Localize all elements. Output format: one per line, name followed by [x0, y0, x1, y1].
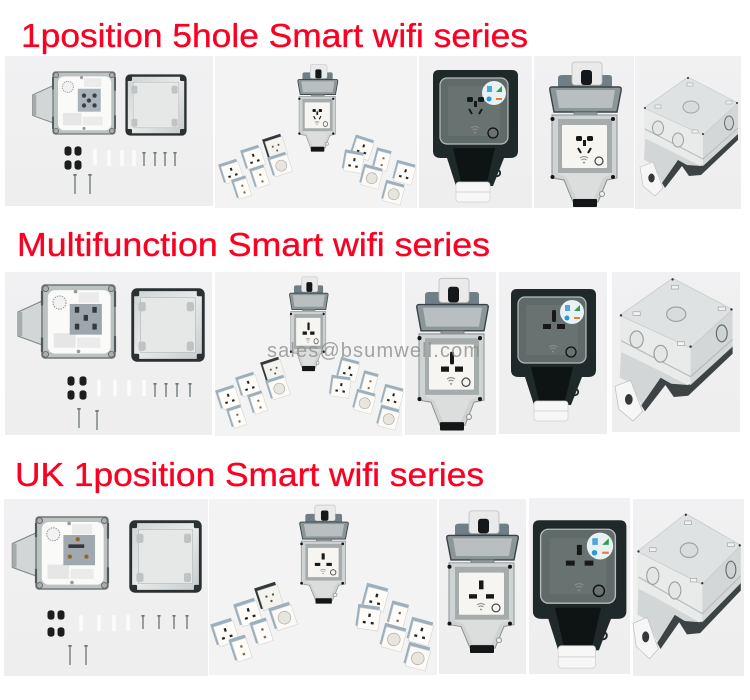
panel: row 3 socket modules: [209, 499, 437, 675]
icon: long screws: [68, 645, 88, 665]
panel: row 1 kit parts: [5, 56, 213, 206]
icon: rubber plugs: [64, 146, 82, 170]
icon: open socket unit: [298, 65, 338, 152]
icon: lid: [131, 522, 200, 591]
icon: junction box: [633, 514, 741, 659]
icon: closed socket cover: [433, 70, 518, 202]
panel: row 3 kit parts: [4, 499, 208, 676]
panel: row 1 closed unit: [419, 56, 532, 208]
icon: rubber plugs: [68, 376, 86, 400]
panel: row 2 socket modules: [215, 272, 405, 436]
icon: wall anchors: [93, 149, 136, 166]
icon: open socket unit: [300, 505, 348, 604]
panel: row 1 open unit: [534, 56, 634, 208]
icon: right module group: [341, 134, 417, 205]
icon: open socket unit: [290, 277, 328, 371]
icon: right module group: [329, 357, 405, 430]
panel: row 3 junction box: [633, 499, 744, 676]
icon: long screws: [77, 408, 99, 430]
icon: open base box: [12, 517, 108, 589]
icon: short screws: [142, 152, 177, 166]
title: Multifunction Smart wifi series: Multifunction Smart wifi series: [17, 226, 490, 263]
icon: open socket unit: [550, 62, 621, 207]
icon: short screws: [141, 615, 189, 629]
panel: row 2 junction box: [612, 272, 740, 432]
panel: row 2 open unit: [405, 272, 496, 435]
title: UK 1position Smart wifi series: UK 1position Smart wifi series: [15, 456, 484, 493]
icon: right module group: [355, 583, 434, 671]
panel: row 2 kit parts: [5, 272, 212, 435]
icon: junction box: [615, 278, 733, 421]
title: 1position 5hole Smart wifi series: 1position 5hole Smart wifi series: [21, 17, 528, 54]
panel: row 2 closed unit: [499, 272, 607, 434]
watermark: sales@bsumwell.com: [267, 340, 480, 362]
icon: junction box: [640, 77, 738, 196]
icon: left module group: [215, 356, 291, 429]
icon: rubber plugs: [48, 610, 64, 637]
panel: row 1 junction box: [635, 56, 741, 209]
icon: open base box: [18, 285, 115, 358]
panel: row 3 closed unit: [529, 498, 630, 674]
panel: row 1 socket modules: [215, 56, 417, 208]
icon: lid: [133, 290, 203, 360]
icon: left module group: [218, 133, 293, 200]
icon: open socket unit: [447, 511, 518, 653]
icon: closed socket cover: [511, 289, 596, 421]
icon: short screws: [153, 383, 192, 397]
panel: row 3 open unit: [439, 499, 526, 674]
icon: lid: [127, 76, 185, 134]
icon: open base box: [33, 72, 115, 134]
icon: long screws: [73, 174, 92, 194]
icon: closed socket cover: [533, 520, 626, 668]
icon: left module group: [210, 581, 297, 663]
icon: wall anchors: [79, 615, 130, 631]
icon: wall anchors: [97, 380, 146, 396]
icon: open socket unit: [417, 278, 488, 431]
